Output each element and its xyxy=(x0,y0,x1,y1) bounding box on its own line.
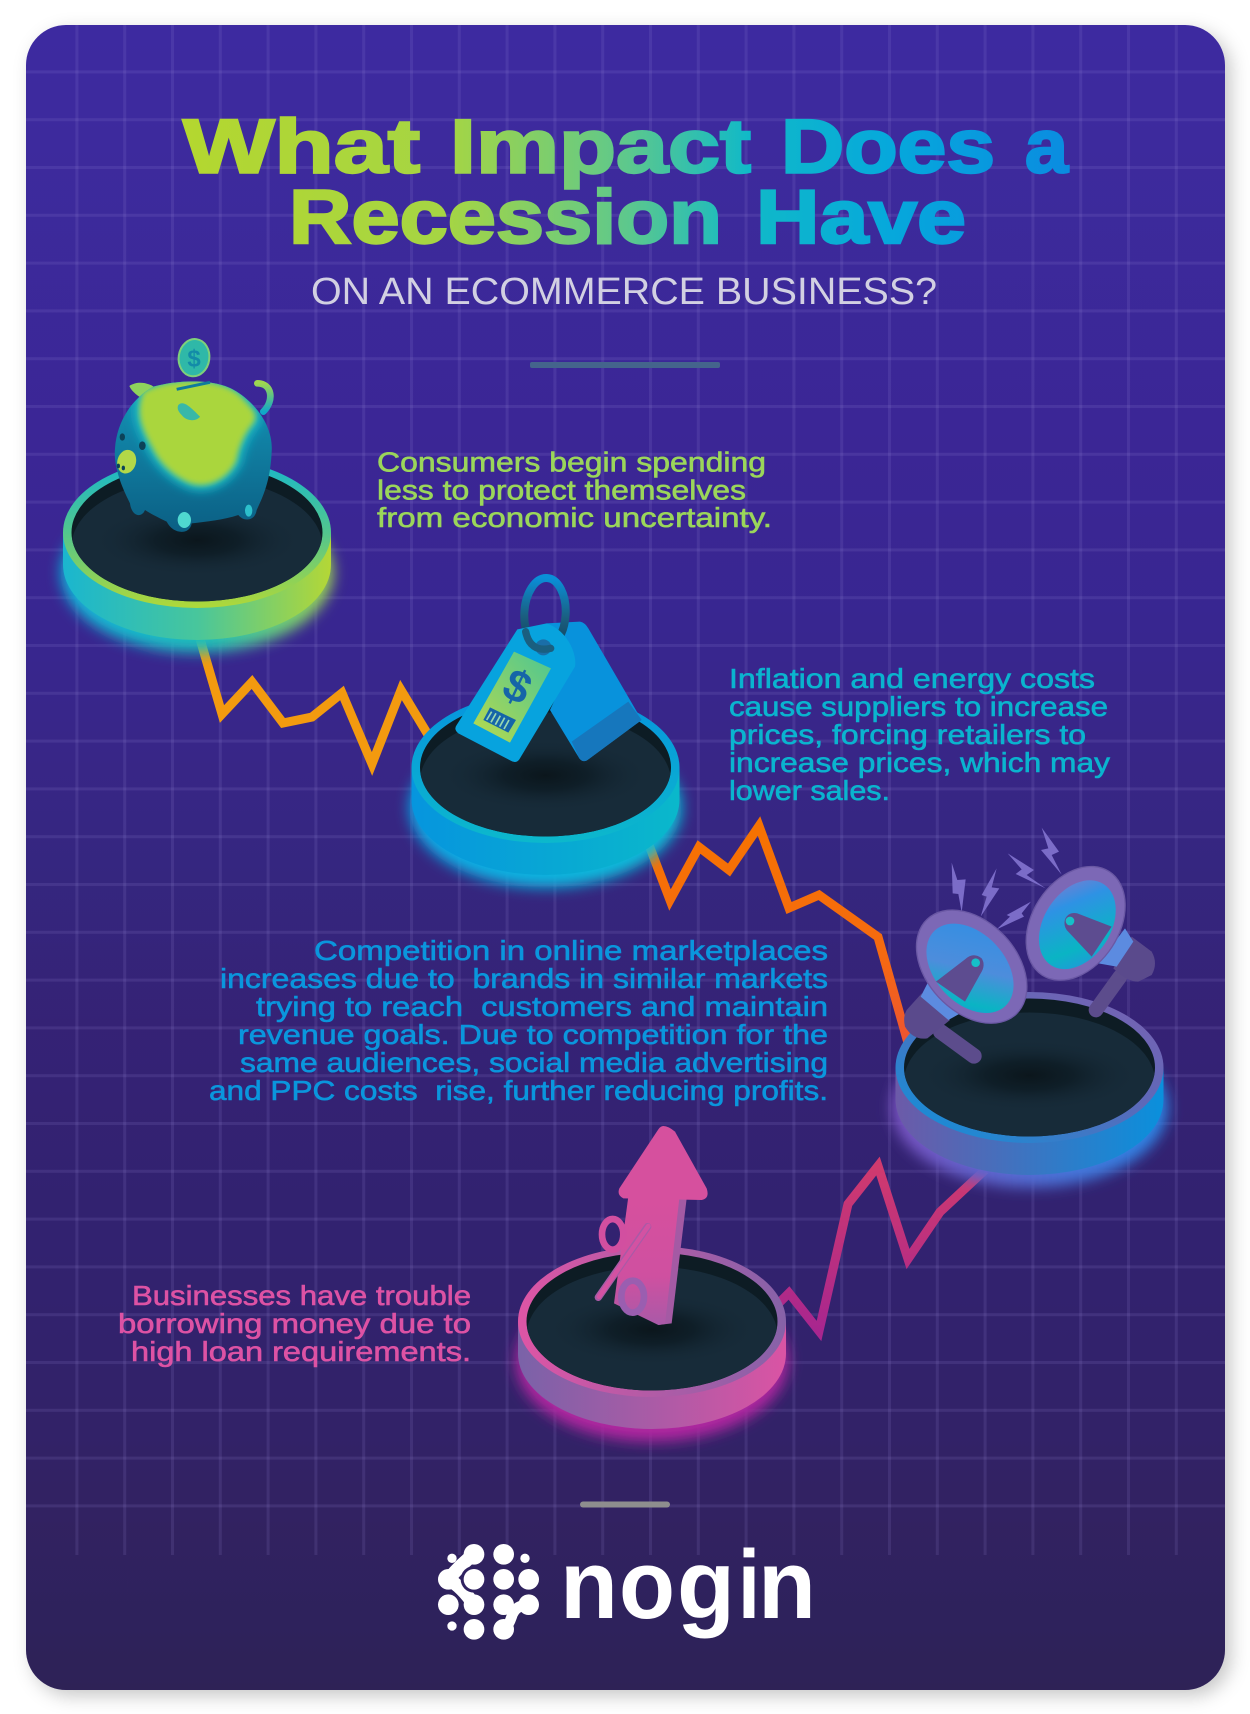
text: borrowing: Businesses have trouble xyxy=(132,1280,471,1311)
title: Does xyxy=(781,104,995,190)
platform 2 xyxy=(410,692,682,888)
text: inflation xyxy=(729,663,1110,806)
logo: nogin xyxy=(438,1530,816,1640)
logo wordmark: n xyxy=(758,1530,816,1639)
text: borrowing: high loan requirements. xyxy=(131,1336,471,1367)
text: competition: trying to reach customers and maintain xyxy=(256,991,828,1022)
icon: price tags xyxy=(455,577,642,762)
logo wordmark: g xyxy=(677,1530,735,1639)
platform 1 xyxy=(61,457,333,652)
declining line: piggy bank to price tag xyxy=(198,632,430,764)
title: Have xyxy=(756,175,966,260)
icon: percent arrow xyxy=(598,1126,708,1325)
heading divider xyxy=(530,362,720,368)
rising line: percent arrow to megaphones xyxy=(776,1166,985,1331)
text: inflation: lower sales. xyxy=(729,775,890,806)
text: consumers: from economic uncertainty. xyxy=(377,502,772,533)
text: inflation: cause suppliers to increase xyxy=(729,691,1108,722)
title: Impact xyxy=(450,104,751,190)
title: a xyxy=(1025,104,1069,190)
text: borrowing: borrowing money due to xyxy=(118,1308,471,1339)
icon: percent sign xyxy=(598,1219,648,1313)
icon: piggy bank with coin xyxy=(115,337,272,532)
text: consumers: less to protect themselves xyxy=(377,474,746,506)
text: competition: same audiences, social media advertising xyxy=(240,1047,828,1078)
declining line: price tag to megaphones xyxy=(649,826,910,1050)
text: competition: revenue goals. Due to competition for the xyxy=(238,1019,828,1050)
text: borrowing xyxy=(118,1280,471,1367)
icon: price tags: $ xyxy=(495,658,540,715)
logo wordmark: o xyxy=(619,1530,675,1639)
logo wordmark: n xyxy=(560,1530,618,1639)
text: competition xyxy=(209,935,828,1106)
icon: megaphones with sound bolts xyxy=(894,828,1155,1056)
icon: sound bolts xyxy=(952,828,1062,929)
title: Recession xyxy=(289,175,722,260)
text: inflation: Inflation and energy costs xyxy=(729,663,1095,694)
logo wordmark xyxy=(560,1530,816,1639)
title xyxy=(183,104,1069,260)
icon: left megaphone xyxy=(894,888,1049,1056)
text: inflation: increase prices, which may xyxy=(729,747,1110,778)
platform 4 xyxy=(516,1246,788,1442)
text: consumers xyxy=(377,446,772,533)
text: inflation: prices, forcing retailers to xyxy=(729,719,1086,750)
logo wordmark: i xyxy=(738,1530,760,1639)
platform 3 xyxy=(892,992,1168,1188)
text: competition: Competition in online marketplaces xyxy=(314,935,828,966)
icon: coin xyxy=(176,337,212,378)
icon: coin: $ xyxy=(187,346,201,373)
footer divider xyxy=(580,1502,670,1508)
subtitle: ON AN ECOMMERCE BUSINESS? xyxy=(311,271,937,313)
title: What xyxy=(183,104,420,190)
logo mark xyxy=(438,1544,539,1640)
icon: right megaphone xyxy=(1006,848,1155,1010)
text: competition: increases due to brands in similar markets xyxy=(220,963,828,994)
text: consumers: Consumers begin spending xyxy=(377,446,766,478)
text: competition: and PPC costs rise, further reducing profits. xyxy=(209,1075,828,1106)
